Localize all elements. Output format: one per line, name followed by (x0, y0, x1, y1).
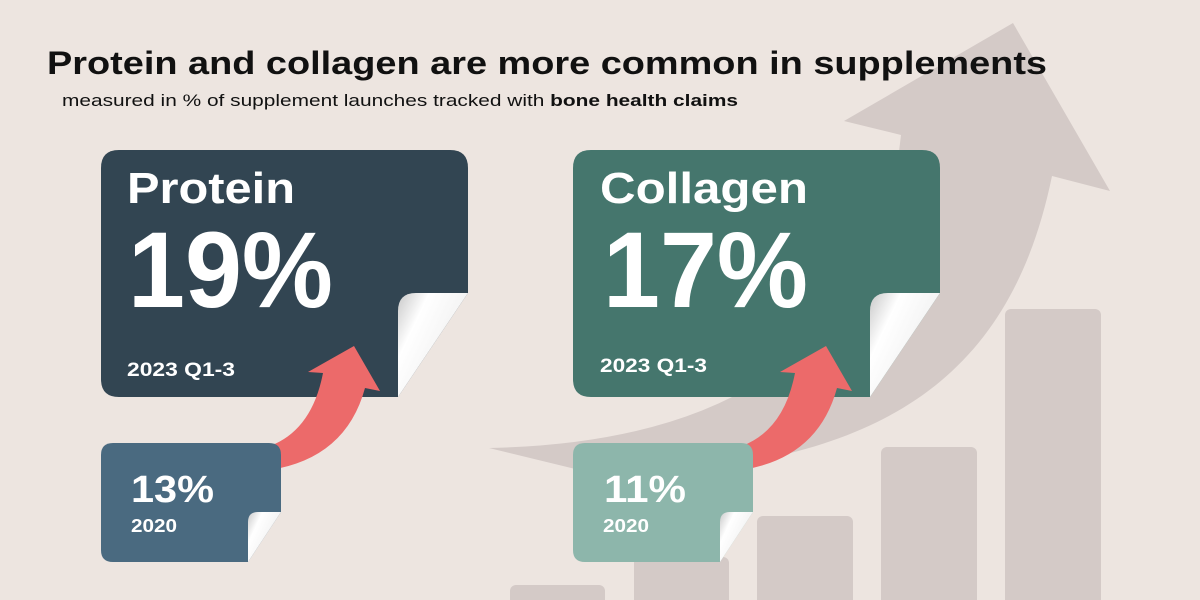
panel: protein 2023 (101, 150, 468, 397)
panel: protein 2020: 13% (131, 469, 214, 511)
panel: collagen 2023: Collagen (600, 164, 808, 213)
label: Protein (127, 164, 295, 213)
value: 19% (128, 209, 333, 330)
panel: collagen 2020 (573, 443, 753, 562)
panel: protein 2020: 2020 (131, 516, 177, 536)
page curl (398, 293, 468, 397)
panel: collagen 2023: 17% (603, 209, 808, 330)
panel: protein 2020 (101, 443, 281, 562)
title: Protein and collagen are more common in supplements (47, 45, 1047, 81)
background trend arrow (489, 23, 1110, 475)
background bar chart (510, 309, 1101, 600)
panel: collagen 2020: 11% (604, 469, 686, 511)
panel: collagen 2023 (573, 150, 940, 397)
subtitle: measured in % of supplement launches tracked with bone health claims (62, 91, 738, 110)
arrow: protein growth (270, 346, 380, 470)
panel: collagen 2023: 2023 Q1-3 (600, 356, 707, 377)
period: 2023 Q1-3 (127, 360, 235, 381)
panel: collagen 2020: 2020 (603, 516, 649, 536)
arrow: collagen growth (742, 346, 852, 470)
